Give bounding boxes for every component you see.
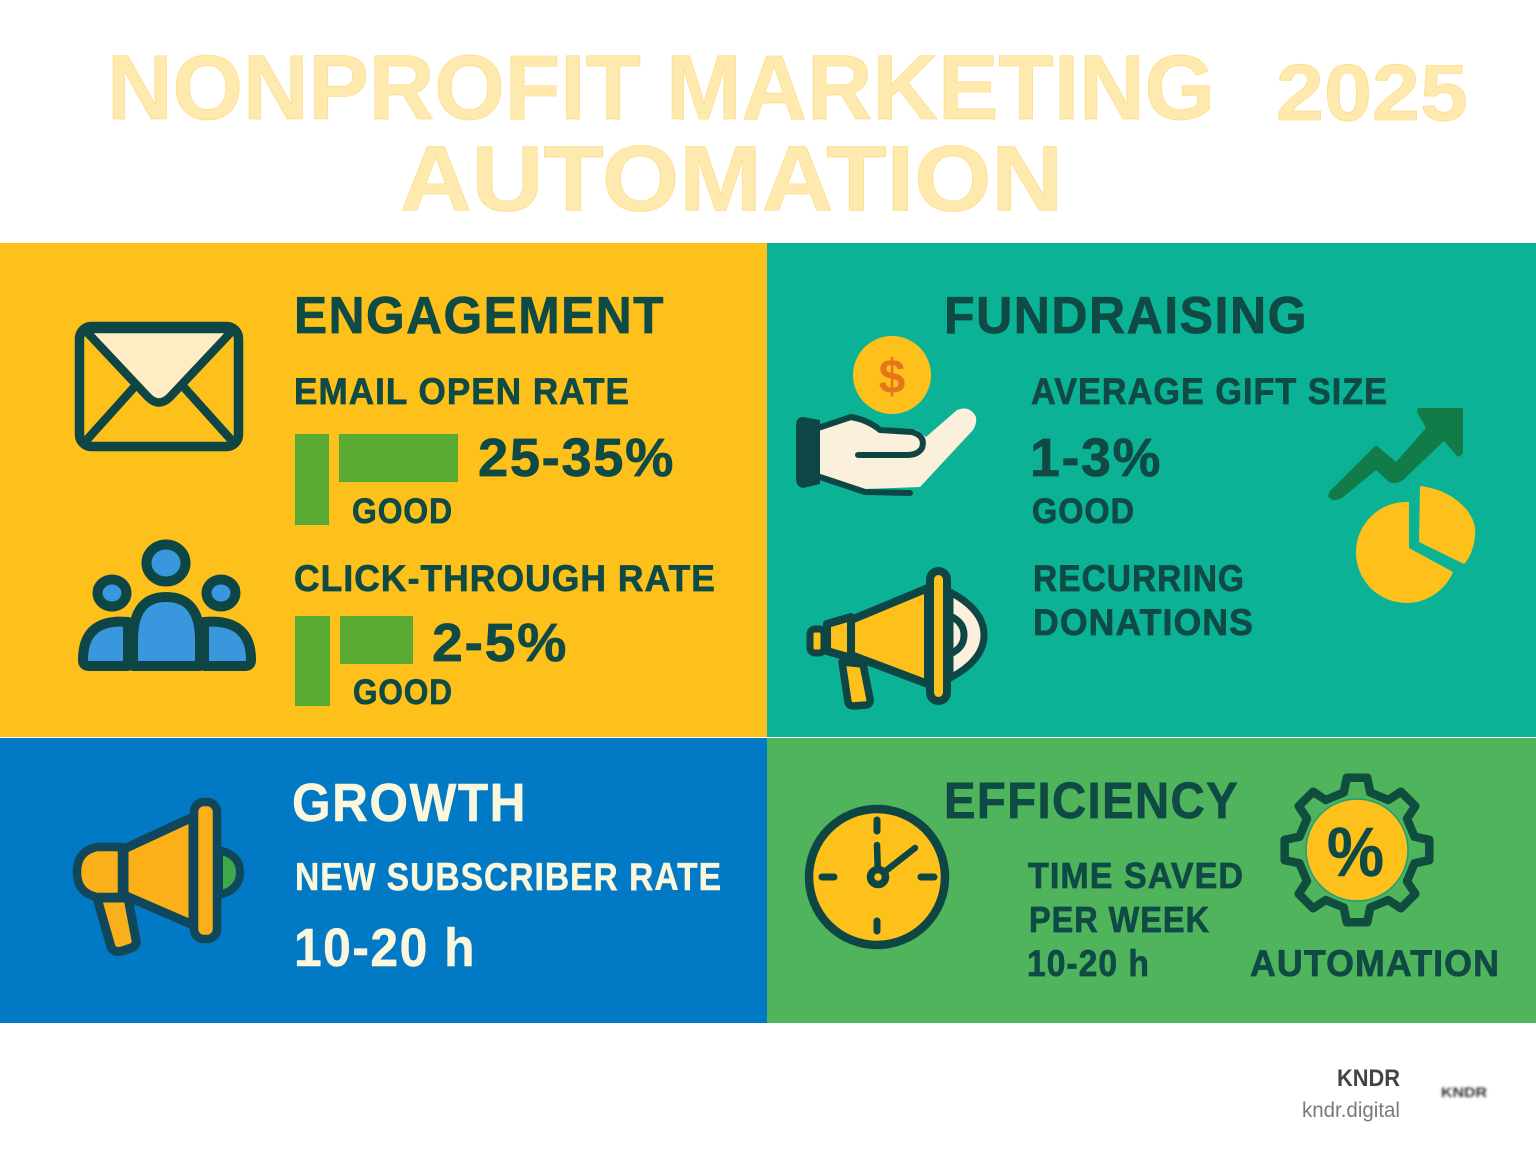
metric: click-through rate: CLICK-THROUGH RATE	[294, 558, 716, 599]
footer: brand	[1302, 1065, 1400, 1122]
metric: click-through rate: GOOD	[353, 673, 453, 712]
heading: growth: GROWTH	[292, 773, 527, 833]
metric: average gift size: AVERAGE GIFT SIZE	[1031, 371, 1388, 412]
icon: people	[83, 544, 251, 666]
metric: click-through rate	[294, 558, 716, 712]
metric: recurring donations	[1033, 558, 1254, 643]
title: NONPROFIT MARKETING	[107, 37, 1215, 139]
heading: engagement: ENGAGEMENT	[294, 287, 665, 345]
metric: email open rate: 25-35%	[478, 428, 675, 488]
metric: email open rate	[294, 371, 675, 531]
title	[107, 37, 1468, 230]
metric: average gift size: GOOD	[1032, 492, 1135, 531]
metric: time saved per week: PER WEEK	[1029, 899, 1210, 940]
panel: growth	[0, 738, 767, 1023]
title: 2025	[1276, 48, 1468, 137]
icon: megaphone	[810, 571, 984, 706]
metric: click-through rate: 2-5%	[432, 613, 568, 673]
icon: automation gear	[1285, 778, 1429, 922]
metric: recurring donations: DONATIONS	[1033, 602, 1254, 643]
metric: new subscriber rate: NEW SUBSCRIBER RATE	[295, 856, 722, 899]
heading: fundraising: FUNDRAISING	[944, 287, 1308, 345]
bar chart: click-through rate	[296, 616, 412, 706]
icon: automation gear: %	[1327, 813, 1384, 891]
heading: efficiency: EFFICIENCY	[944, 772, 1239, 829]
footer: brand: KNDR	[1337, 1065, 1400, 1092]
title: AUTOMATION	[400, 126, 1063, 230]
metric: average gift size	[1030, 371, 1388, 531]
metric: new subscriber rate: 10-20 h	[294, 918, 476, 978]
icon: trend arrow	[1328, 408, 1463, 500]
footer: brand: kndr.digital	[1302, 1099, 1400, 1122]
metric: time saved per week: TIME SAVED	[1028, 855, 1244, 896]
icon: hand with coin: $	[879, 351, 906, 404]
icon: hand with coin	[796, 336, 976, 493]
icon: megaphone	[77, 802, 240, 952]
logo: kndr: KNDR	[1441, 1084, 1487, 1100]
icon: clock	[809, 809, 945, 945]
metric: email open rate: GOOD	[352, 492, 453, 531]
metric: new subscriber rate	[294, 856, 722, 978]
icon: envelope	[80, 326, 238, 446]
metric: time saved per week	[1027, 855, 1244, 984]
icon: pie chart	[1356, 486, 1475, 603]
metric: average gift size: 1-3%	[1030, 428, 1162, 488]
label: automation: AUTOMATION	[1250, 943, 1500, 984]
metric: email open rate: EMAIL OPEN RATE	[294, 371, 630, 412]
bar chart: email open rate	[296, 434, 458, 524]
metric: time saved per week: 10-20 h	[1027, 943, 1150, 984]
panel: efficiency	[767, 738, 1536, 1023]
panel: fundraising	[767, 243, 1536, 737]
panel: engagement	[0, 243, 767, 737]
metric: recurring donations: RECURRING	[1033, 558, 1245, 599]
